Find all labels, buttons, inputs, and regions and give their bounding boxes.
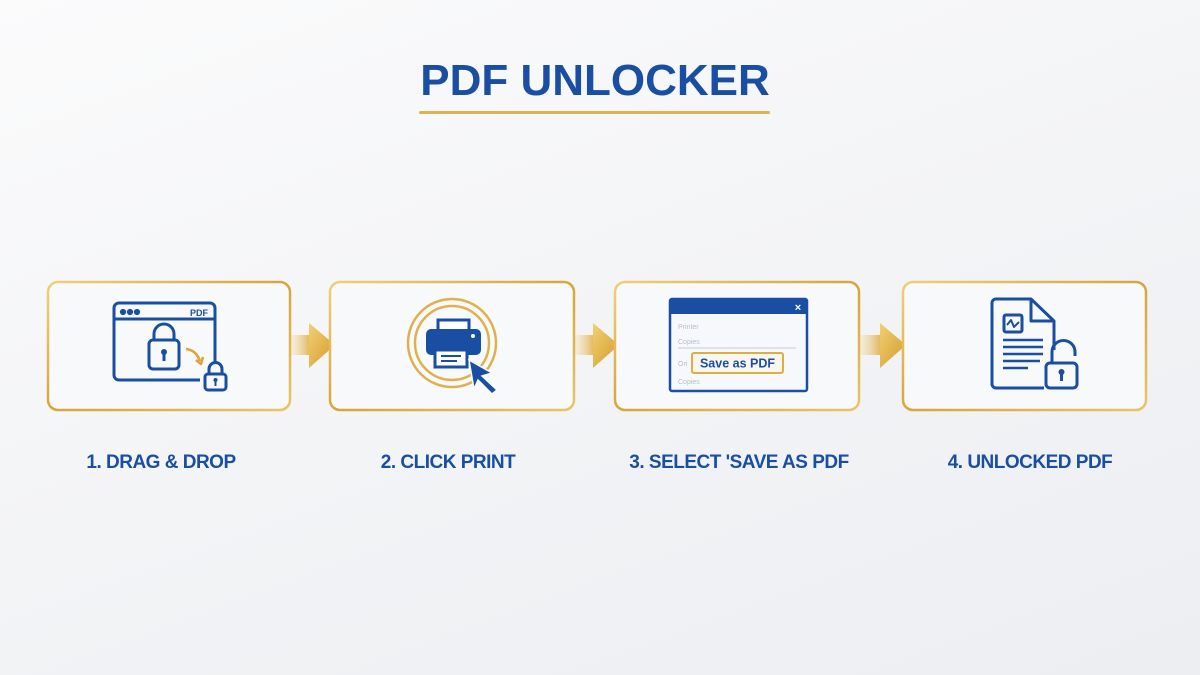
panel: step 3 select save as pdf xyxy=(615,282,859,410)
label: step 4: 4. UNLOCKED PDF xyxy=(948,452,1112,473)
icon: document with open lock xyxy=(992,299,1077,388)
icon: print dialog: Copies xyxy=(678,339,700,346)
icon: print dialog xyxy=(670,299,807,391)
button: save as pdf: Save as PDF xyxy=(700,356,775,370)
panel: step 2 click print xyxy=(330,282,574,410)
label: step 2: 2. CLICK PRINT xyxy=(381,452,516,473)
icon: printer with cursor xyxy=(408,299,497,394)
arrow: step 2 to 3 xyxy=(574,323,619,368)
icon: browser window with locks xyxy=(114,303,226,390)
panel: step 1 drag and drop: PDF xyxy=(190,308,209,318)
icon: print dialog: × xyxy=(795,302,801,314)
panel: step 1 drag and drop xyxy=(48,282,290,410)
arrow: step 1 to 2 xyxy=(290,323,335,368)
title: PDF UNLOCKER xyxy=(420,56,770,105)
label: step 1: 1. DRAG & DROP xyxy=(86,452,236,473)
panel: step 4 unlocked pdf xyxy=(903,282,1146,410)
icon: print dialog: Copies xyxy=(678,379,700,386)
label: step 3: 3. SELECT 'SAVE AS PDF xyxy=(629,452,849,473)
icon: print dialog: Ori xyxy=(678,361,688,368)
icon: print dialog: Printer xyxy=(678,324,699,331)
arrow: step 3 to 4 xyxy=(859,323,906,368)
